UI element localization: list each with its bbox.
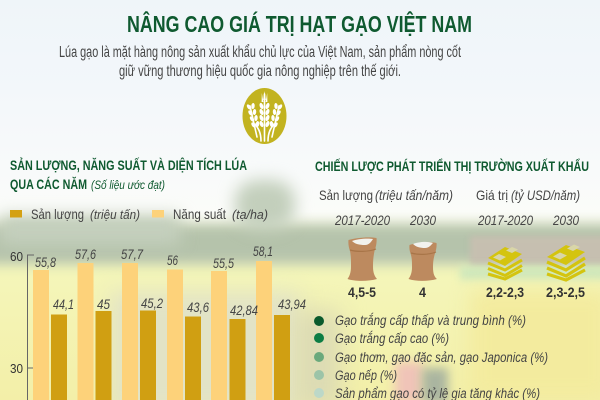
strategy values: 4 [419,284,426,300]
intro text: giữ vững thương hiệu quốc gia nông nghiệp trên thế giới. [119,63,401,80]
heading: production chart: (Số liệu ước đạt) [91,178,165,192]
strategy values: 2,3-2,5 [546,284,585,300]
chart axis [10,249,34,400]
period labels: 2030 [552,213,579,228]
production value labels: 44,1 [53,296,74,312]
icon: rice sack small [408,242,437,281]
yield value labels [35,243,273,271]
production value labels [53,295,306,318]
rice category legend: Gạo thơm, gạo đặc sản, gạo Japonica (%) [335,350,548,365]
heading: production chart [10,158,247,192]
strategy values [348,284,585,300]
rice category legend: Gạo trắng cấp cao (%) [335,331,449,346]
strategy values: 2,2-2,3 [486,284,524,300]
production value labels: 45,2 [141,295,163,311]
yield bars [33,261,272,400]
column headers: volume and value: Giá trị [476,187,508,203]
column headers: volume and value: (tỷ USD/năm) [511,187,580,203]
strategy values: 4,5-5 [348,284,376,300]
column headers: volume and value: Sản lượng [319,187,373,203]
chart axis: 30 [10,361,23,376]
rice category legend [314,313,548,400]
chart legend: Năng suất [173,206,226,222]
production value labels: 43,94 [278,296,306,312]
bar chart: production and yield [10,243,306,400]
chart axis: 60 [10,249,23,264]
yield value labels: 58,1 [253,243,273,259]
heading: production chart: SẢN LƯỢNG, NĂNG SUẤT VÀ DIỆN TÍCH LÚA [10,158,247,173]
rice category legend: Gạo nếp (%) [335,368,397,383]
chart legend: (tạ/ha) [232,207,268,222]
period labels: 2017-2020 [334,213,390,228]
yield value labels: 55,8 [35,254,56,270]
chart legend: (triệu tấn) [90,207,140,222]
icon: rice ears in olive oval [242,88,286,144]
chart legend [10,206,268,222]
chart legend: Sản lượng [31,206,84,222]
production bars [51,310,290,400]
column headers: volume and value [319,187,580,203]
period labels [334,213,579,228]
yield value labels: 55,5 [213,255,234,271]
production value labels: 45 [97,296,110,312]
production value labels: 43,6 [187,299,209,315]
yield value labels: 57,6 [75,246,96,262]
title: NÂNG CAO GIÁ TRỊ HẠT GẠO VIỆT NAM [127,10,472,37]
heading: production chart: QUA CÁC NĂM [10,177,87,192]
rice category legend: Gạo trắng cấp thấp và trung bình (%) [335,313,526,328]
period labels: 2017-2020 [477,213,533,228]
column headers: volume and value: (triệu tấn/năm) [375,187,453,203]
icon: money stack left [488,247,522,279]
icon: rice sack large [348,237,377,281]
period labels: 2030 [409,213,436,228]
icon: money stack right [547,244,585,280]
intro text [59,44,461,80]
yield value labels: 56 [167,252,178,268]
yield value labels: 57,7 [121,246,144,262]
production value labels: 42,84 [230,302,258,318]
